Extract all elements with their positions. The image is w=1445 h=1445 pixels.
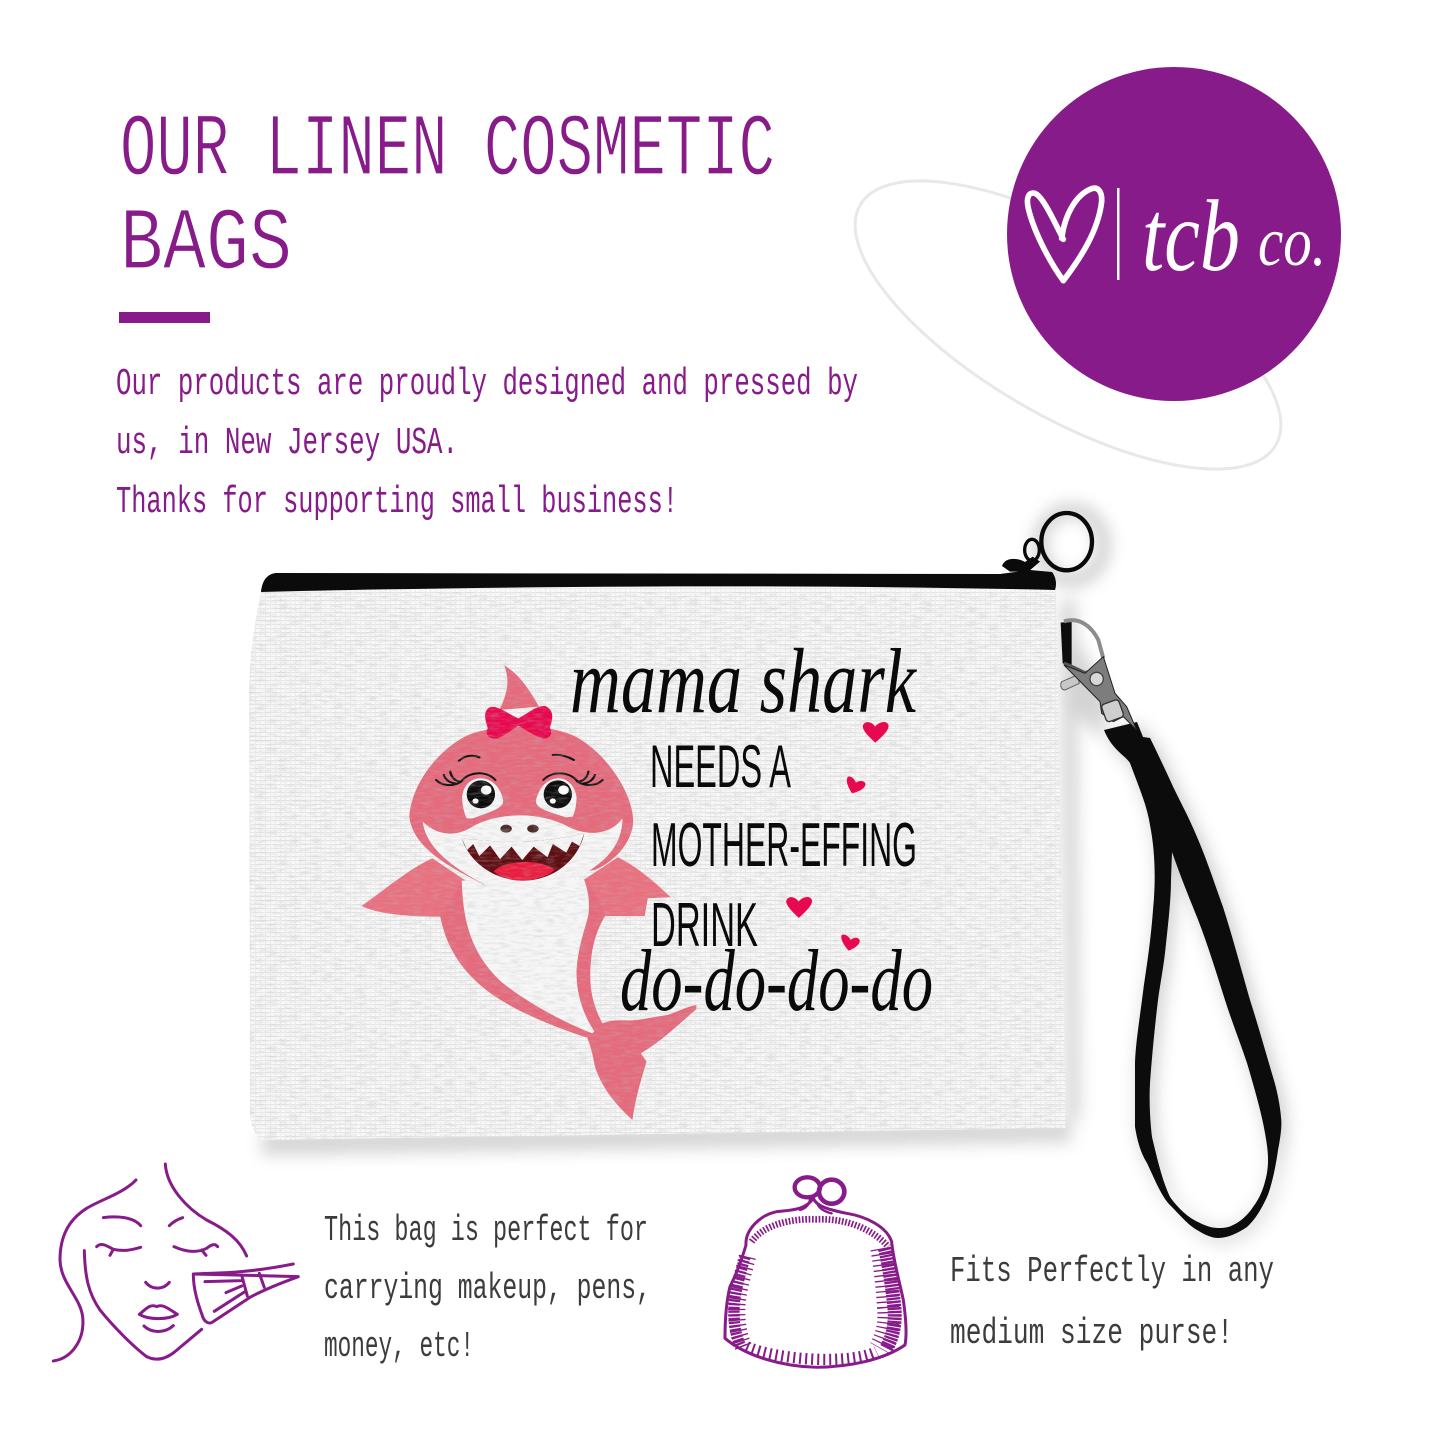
- orbit ring behind logo: [814, 125, 1322, 525]
- clasp lever: [1061, 675, 1079, 690]
- nostrils: [500, 825, 539, 833]
- feature text: purse: Fits Perfectly in any: [950, 1251, 1274, 1292]
- linen texture overlay: [245, 592, 1070, 1142]
- linen bag: [249, 570, 1066, 1140]
- clasp hook: [1064, 620, 1103, 658]
- eye pupils: [467, 780, 572, 808]
- purse outline: [725, 1198, 906, 1367]
- strap loop: [1061, 622, 1072, 665]
- bag wrist strap: [1104, 722, 1281, 1238]
- title underline bar: [119, 312, 210, 323]
- zipper pull and key ring: [1002, 510, 1103, 580]
- intro text: us, in New Jersey USA.: [116, 422, 458, 465]
- metal swivel clasp: [1061, 620, 1137, 730]
- mouth: [462, 833, 584, 881]
- hearts: [786, 722, 889, 951]
- clasp body: [1064, 657, 1137, 730]
- intro text: Thanks for supporting small business!: [116, 481, 678, 524]
- zipper hook: [1002, 557, 1040, 572]
- title: [120, 102, 775, 295]
- slogan line: do-do-do-do: do-do-do-do: [620, 933, 933, 1030]
- left side spikes: [737, 1257, 747, 1347]
- logo wordmark: co.: [1258, 204, 1326, 281]
- icon: face with makeup brush: [53, 1164, 298, 1361]
- dorsal fin: [499, 665, 539, 710]
- slogan line: drink: DRINK: [651, 891, 758, 960]
- feature text: makeup: [324, 1210, 651, 1367]
- intro text: [116, 363, 858, 524]
- zipper: [261, 570, 1056, 592]
- left side hatching: [734, 1257, 745, 1347]
- eye whites: [462, 778, 577, 818]
- feature text: makeup: This bag is perfect for: [324, 1210, 648, 1251]
- right side spikes: [880, 1248, 889, 1348]
- purse clasp knobs: [795, 1177, 820, 1197]
- feature text: purse: medium size purse!: [950, 1313, 1233, 1354]
- slogan line: needs a: NEEDS A: [650, 733, 791, 800]
- white jaw band: [423, 815, 622, 885]
- bow: [485, 706, 552, 739]
- bag slogan: [570, 630, 933, 1030]
- ring shadow: [1040, 510, 1103, 580]
- head: [409, 727, 633, 885]
- clasp collar: [1101, 699, 1124, 722]
- white belly: [462, 880, 597, 1035]
- logo heart icon: [1027, 188, 1102, 281]
- intro text: Our products are proudly designed and pressed by: [116, 363, 858, 406]
- left flipper: [361, 858, 465, 917]
- tail: [587, 1005, 696, 1120]
- slogan line: mama shark: mama shark: [570, 630, 918, 732]
- shark body: [440, 882, 606, 1038]
- icon: coin purse: [725, 1177, 906, 1367]
- logo wordmark: tcb: [1142, 180, 1240, 293]
- title: OUR LINEN COSMETIC: [120, 102, 775, 201]
- teeth: [462, 833, 584, 860]
- feature text: makeup: money, etc!: [324, 1326, 474, 1367]
- bag shadow: [262, 600, 1110, 1155]
- right side hatching: [885, 1248, 895, 1348]
- bag body: [249, 586, 1066, 1140]
- eye highlights: [472, 785, 569, 804]
- frame hatching: [752, 1219, 888, 1247]
- feature text: purse: [950, 1251, 1274, 1354]
- bottom hatching: [747, 1347, 877, 1359]
- eyelids, lashes and brows: [436, 755, 603, 785]
- strap shadow: [1108, 725, 1285, 1241]
- right flipper: [583, 857, 671, 916]
- logo badge: [1007, 67, 1341, 401]
- tongue: [494, 862, 555, 881]
- logo divider: [1117, 188, 1120, 280]
- feature text: makeup: carrying makeup, pens,: [324, 1268, 651, 1309]
- slogan line: mother-effing: MOTHER-EFFING: [651, 811, 917, 880]
- clasp rivet: [1090, 672, 1103, 686]
- title: BAGS: [120, 196, 292, 295]
- key ring: [1041, 513, 1092, 570]
- shark illustration: [361, 665, 696, 1120]
- small ring: [1025, 539, 1039, 561]
